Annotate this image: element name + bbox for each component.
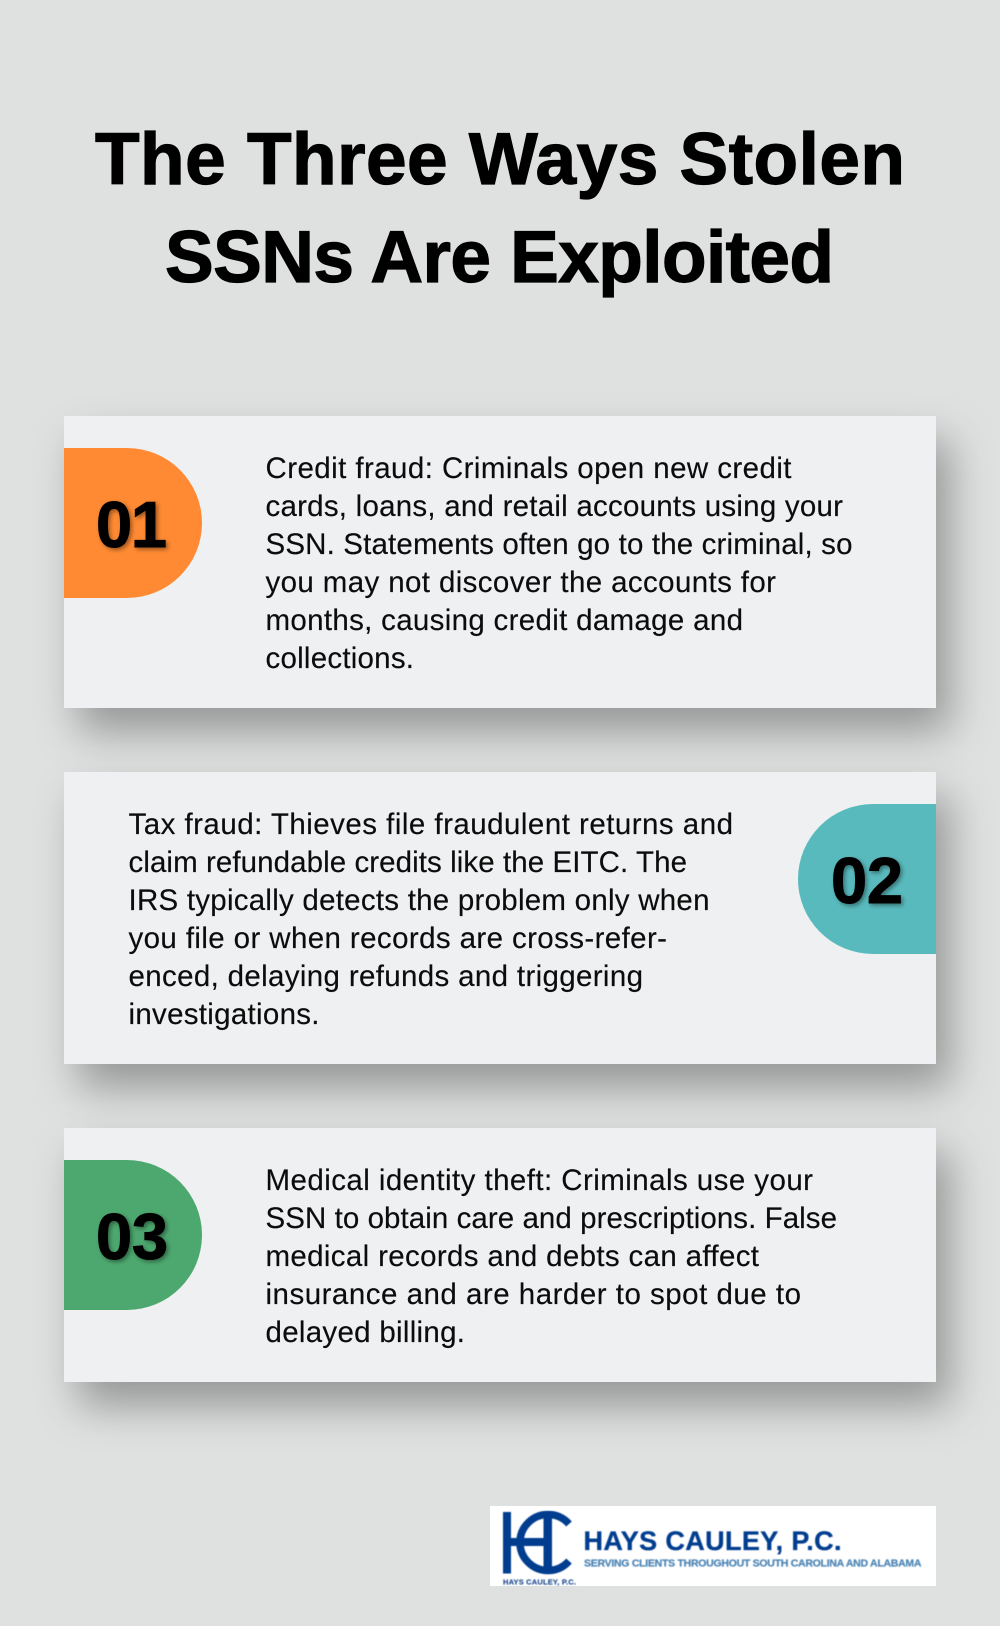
text block: medical identity theft: Medical identity theft: Criminals use your	[266, 1164, 813, 1197]
text block: credit fraud: SSN. Statements often go to the criminal, so	[266, 528, 852, 561]
text block: medical identity theft	[266, 1164, 837, 1349]
logo: Hays Cauley, P.C.	[490, 1506, 936, 1587]
text block: credit fraud: Credit fraud: Criminals open new credit	[266, 452, 792, 485]
text block: tax fraud	[128, 808, 733, 1031]
text block: medical identity theft: delayed billing.	[266, 1316, 465, 1349]
logo tagline: SERVING CLIENTS THROUGHOUT SOUTH CAROLINA AND ALABAMA	[584, 1558, 922, 1570]
panel: tax fraud	[64, 772, 936, 1064]
text block: tax fraud: Tax fraud: Thieves file fraudulent returns and	[128, 808, 733, 841]
text block: credit fraud: you may not discover the accounts for	[266, 566, 776, 599]
text block: tax fraud: you file or when records are cross-refer-	[128, 922, 667, 955]
text block: medical identity theft: insurance and are harder to spot due to	[266, 1278, 801, 1311]
badge: 01: 01	[96, 488, 167, 561]
title: The Three Ways Stolen	[95, 119, 905, 200]
text block: credit fraud: months, causing credit damage and	[266, 604, 743, 637]
text block: credit fraud: collections.	[266, 642, 414, 675]
title: SSNs Are Exploited	[165, 217, 834, 298]
badge: 03: 03	[96, 1200, 168, 1273]
text block: medical identity theft: medical records and debts can affect	[266, 1240, 759, 1273]
icon: HC monogram	[503, 1512, 569, 1574]
text block: tax fraud: investigations.	[128, 998, 320, 1031]
text block: tax fraud: enced, delaying refunds and triggering	[128, 960, 643, 993]
text block: tax fraud: claim refundable credits like the EITC. The	[128, 846, 687, 879]
panel: medical identity theft	[64, 1128, 936, 1382]
logo name: HAYS CAULEY, P.C.	[584, 1526, 842, 1556]
title	[95, 119, 905, 298]
badge: 03	[64, 1160, 202, 1310]
panel: credit fraud	[64, 416, 936, 708]
logo small caption: HAYS CAULEY, P.C.	[503, 1578, 576, 1587]
badge: 01	[64, 448, 202, 598]
badge: 02	[798, 804, 936, 954]
badge: 02: 02	[831, 844, 903, 917]
text block: credit fraud	[266, 452, 852, 675]
text block: medical identity theft: SSN to obtain care and prescriptions. False	[266, 1202, 837, 1235]
text block: tax fraud: IRS typically detects the problem only when	[128, 884, 710, 917]
text block: credit fraud: cards, loans, and retail accounts using your	[266, 490, 843, 523]
